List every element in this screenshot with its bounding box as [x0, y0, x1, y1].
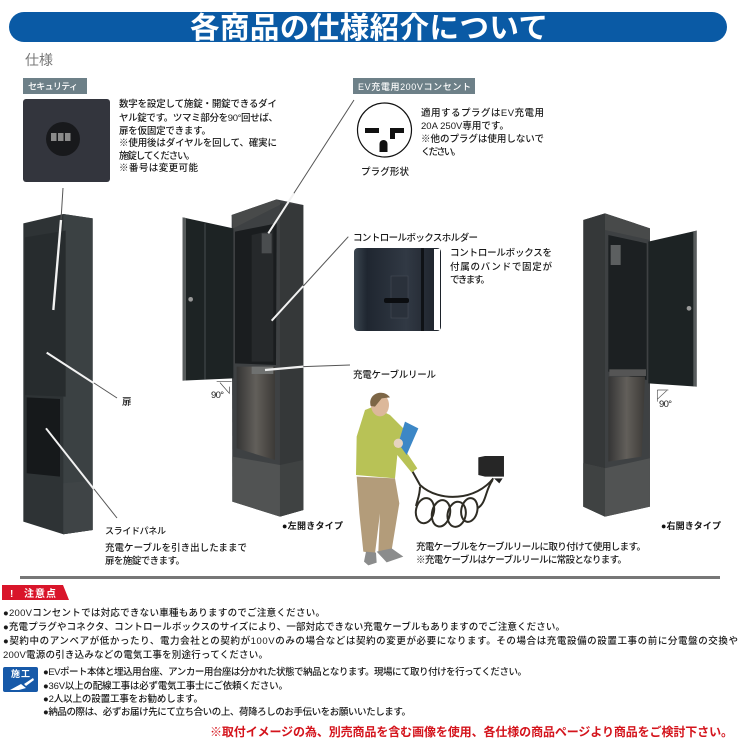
caution notes: ●充電プラグやコネクタ、コントロールボックスのサイズにより、一部対応できない充電ケーブルもありますのでご注意ください。: [3, 621, 565, 633]
EV text: [421, 107, 544, 158]
head: [371, 394, 389, 416]
slide panel text: [105, 526, 247, 567]
construction icon: [3, 667, 38, 692]
right-hinged pillar: [583, 213, 697, 517]
leader line reel white part: [265, 367, 303, 370]
EV text: 適用するプラグはEV充電用: [421, 107, 544, 119]
angle marker: [217, 382, 232, 393]
slide panel text: 扉を施錠できます。: [105, 555, 185, 567]
panel: security: [23, 78, 278, 182]
label: door: 扉: [122, 397, 132, 408]
EV text: ください。: [421, 147, 461, 158]
icon: dial lock photo: [23, 99, 110, 182]
jacket: [356, 407, 417, 478]
security text: 扉を仮固定できます。: [119, 125, 211, 137]
construction notes: ●納品の際は、必ずお届け先にて立ち合いの上、荷降ろしのお手伝いをお願いいたします。: [43, 706, 411, 718]
security text: 施錠してください。: [119, 150, 195, 162]
caution tag: !: [10, 589, 13, 600]
label: 90 degrees left: 90°: [211, 390, 224, 401]
title banner: 各商品の仕様紹介について: [190, 12, 548, 45]
shoes: [364, 548, 403, 565]
photo: holder: [354, 248, 441, 331]
holder text: 付属のバンドで固定が: [450, 261, 552, 273]
construction notes: ●36V以上の配線工事は必ず電気工事士にご依頼ください。: [43, 680, 288, 692]
left closed pillar: [23, 214, 94, 534]
slide panel text: スライドパネル: [105, 526, 166, 536]
illustration: person with cable: [356, 393, 504, 565]
panel: security: セキュリティ: [28, 82, 78, 92]
legs: [357, 477, 399, 553]
label: left-hinged type: ●左開きタイプ: [282, 520, 343, 531]
construction notes: ●2人以上の設置工事をお勧めします。: [43, 693, 203, 705]
security text: ヤル錠です。ツマミ部分を90°回せば、: [119, 112, 278, 124]
caution notes: ●契約中のアンペアが低かったり、電力会社との契約が100Vのみの場合などは契約の変更が必要になります。その場合は充電設備の設置工事の前に分電盤の交換や: [3, 635, 738, 647]
caution notes: 200V電源の引き込みなどの電気工事を別途行ってください。: [3, 649, 268, 661]
plug handle: [398, 422, 418, 455]
leader line: control box holder: [303, 237, 348, 286]
leader line: slide panel: [46, 428, 94, 489]
panel: control box holder: [353, 232, 552, 331]
panel: EV outlet: EV充電用200Vコンセント: [358, 82, 471, 92]
plug caption: プラグ形状: [361, 166, 409, 178]
holder text: [450, 248, 552, 286]
leader line holder white part: [272, 286, 303, 321]
title banner: [9, 12, 727, 45]
label: cable reel: 充電ケーブルリール: [353, 369, 436, 381]
construction notes: ●EVポート本体と埋込用台座、アンカー用台座は分かれた状態で納品となります。現場にて取り付けを行ってください。: [43, 666, 527, 678]
hair: [370, 393, 390, 407]
security text: [119, 98, 278, 174]
leader line: dial: [53, 220, 61, 310]
slide panel text: 充電ケーブルを引き出したままで: [105, 542, 247, 554]
section heading: 仕様: 仕様: [25, 52, 53, 68]
leader line outer segments: [61, 188, 117, 518]
hand: [394, 439, 403, 448]
EV text: ※他のプラグは使用しないで: [421, 133, 544, 145]
open door: [183, 217, 233, 381]
middle left-hinged pillar: [183, 100, 354, 517]
construction icon: 施工: [11, 668, 30, 679]
reel box: [478, 456, 504, 483]
security text: ※使用後はダイヤルを回して、確実に: [119, 137, 277, 149]
red note: ※取付イメージの為、別売商品を含む画像を使用、各仕様の商品ページより商品をご検討下さい。: [210, 724, 733, 739]
holder text: できます。: [450, 275, 490, 286]
leader line: door: [47, 353, 94, 383]
angle marker right: [657, 390, 668, 402]
label: 90 degrees right: 90°: [659, 399, 672, 410]
icon: plug shape: [358, 103, 412, 157]
cable text: [416, 541, 646, 566]
label: right-hinged type: ●右開きタイプ: [661, 520, 721, 531]
leader line: EV outlet: [268, 100, 354, 233]
EV text: 20A 250V専用です。: [421, 120, 509, 132]
divider: [20, 576, 720, 579]
panel: control box holder: コントロールボックスホルダー: [353, 232, 478, 244]
security text: 数字を設定して施錠・開錠できるダイ: [119, 98, 277, 110]
holder text: コントロールボックスを: [450, 248, 552, 259]
panel: EV outlet: [353, 78, 544, 178]
leader line: cable reel: [303, 365, 350, 367]
caution notes: [3, 607, 738, 661]
open door right: [648, 231, 697, 387]
cable: [403, 455, 493, 529]
construction notes: [43, 666, 527, 718]
cable text: ※充電ケーブルはケーブルリールに常設となります。: [416, 554, 627, 566]
caution notes: ●200Vコンセントでは対応できない車種もありますのでご注意ください。: [3, 607, 325, 619]
caution tag: 注意点: [24, 587, 56, 600]
security text: ※番号は変更可能: [119, 162, 198, 174]
leader line EV white part: [268, 193, 294, 233]
cable text: 充電ケーブルをケーブルリールに取り付けて使用します。: [416, 541, 646, 553]
caution tag: [2, 585, 69, 600]
